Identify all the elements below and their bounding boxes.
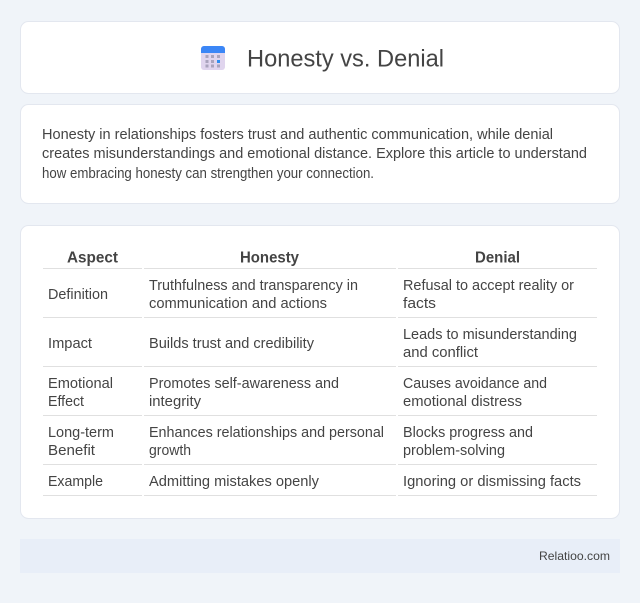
icon: calendar [201, 46, 225, 70]
row: definition: Refusal to accept reality or [403, 278, 574, 294]
table header row [67, 250, 520, 266]
panel: intro [20, 104, 620, 204]
row: emotional effect: emotional distress [403, 394, 522, 410]
intro text: how embracing honesty can strengthen your connection. [42, 166, 374, 182]
row: impact [48, 327, 577, 361]
row: example: Admitting mistakes openly [149, 474, 320, 490]
row: impact: and conflict [403, 345, 478, 361]
row: emotional effect: Promotes self-awareness and [149, 376, 339, 392]
row: impact: Leads to misunderstanding [403, 327, 577, 343]
row: long-term benefit: growth [149, 443, 191, 459]
row: definition: communication and actions [149, 296, 327, 312]
row: example: Ignoring or dismissing facts [403, 474, 581, 490]
row: definition: Definition [48, 287, 108, 303]
row: definition: facts [403, 296, 436, 312]
row: definition [48, 278, 574, 312]
row: emotional effect: Effect [48, 394, 84, 410]
row: example [48, 474, 581, 490]
footer [20, 539, 620, 573]
row: emotional effect [48, 376, 547, 410]
panel: comparison table [20, 226, 620, 518]
row: long-term benefit: Blocks progress and [403, 425, 533, 441]
table header row: Aspect [67, 250, 118, 266]
intro text: Honesty in relationships fosters trust and authentic communication, while denial [42, 127, 553, 143]
row: emotional effect: integrity [149, 394, 202, 410]
title: Honesty vs. Denial [247, 46, 444, 72]
row: long-term benefit: Benefit [48, 443, 95, 459]
footer text: Relatioo.com [539, 549, 610, 563]
row: impact: Builds trust and credibility [149, 336, 315, 352]
intro text: creates misunderstandings and emotional distance. Explore this article to understand [42, 146, 587, 162]
row: example: Example [48, 474, 103, 490]
table header row: Denial [475, 250, 520, 266]
row: impact: Impact [48, 336, 92, 352]
row: long-term benefit: problem-solving [403, 443, 505, 459]
row: long-term benefit: Long-term [48, 425, 114, 441]
row: long-term benefit [48, 425, 533, 459]
row: emotional effect: Emotional [48, 376, 113, 392]
row: long-term benefit: Enhances relationships and personal [149, 425, 384, 441]
row: emotional effect: Causes avoidance and [403, 376, 547, 392]
table header row: Honesty [240, 250, 299, 266]
panel: header [20, 22, 620, 94]
row: definition: Truthfulness and transparency in [149, 278, 358, 294]
intro text [42, 127, 587, 182]
